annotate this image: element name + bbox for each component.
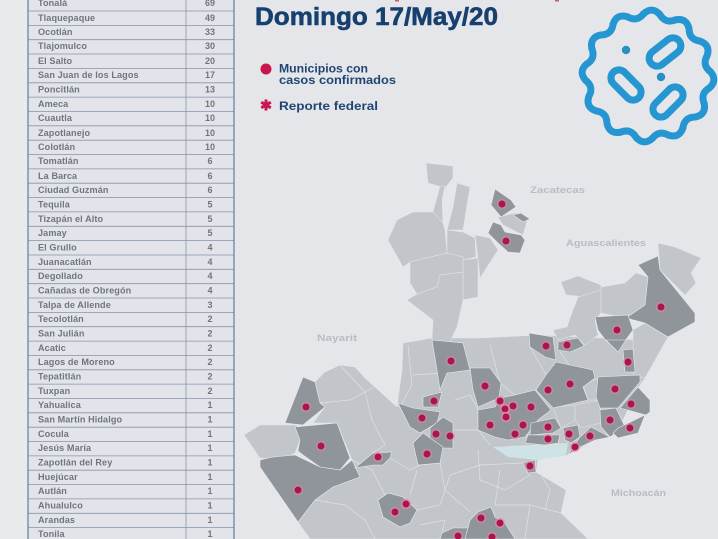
municipality names: Degollado bbox=[38, 271, 83, 281]
municipality names: Juanacatlán bbox=[38, 257, 92, 267]
municipality names: Tecolotlán bbox=[38, 314, 84, 324]
case counts: 2 bbox=[207, 357, 213, 367]
case counts: 1 bbox=[207, 458, 213, 468]
municipality names: Cuautla bbox=[38, 113, 73, 123]
municipality names: Ahualulco bbox=[38, 500, 83, 510]
municipality names: Tonila bbox=[38, 529, 66, 539]
legend: confirmed cases: casos confirmados bbox=[279, 75, 396, 87]
municipality names: Zapotlán del Rey bbox=[38, 458, 113, 468]
map: case markers bbox=[293, 199, 666, 539]
municipality names: Poncitlán bbox=[38, 84, 80, 94]
map: lake Chapala bbox=[493, 443, 568, 460]
case counts: 2 bbox=[207, 343, 213, 353]
municipality names: San Martín Hidalgo bbox=[38, 414, 122, 424]
case counts: 1 bbox=[207, 443, 213, 453]
legend bbox=[260, 64, 396, 113]
case counts: 20 bbox=[205, 56, 215, 66]
case counts bbox=[205, 0, 215, 539]
municipality names: Tizapán el Alto bbox=[38, 214, 104, 224]
case counts: 10 bbox=[205, 113, 215, 123]
municipality names: Tequila bbox=[38, 200, 71, 210]
legend: confirmed cases: Municipios con bbox=[279, 64, 368, 76]
case counts: 1 bbox=[207, 486, 213, 496]
panel: table of municipalities bbox=[28, 0, 234, 539]
case counts: 1 bbox=[207, 529, 213, 539]
municipality names: Ameca bbox=[38, 99, 69, 109]
municipality names: Colotlán bbox=[38, 142, 75, 152]
map: dark municipalities with cases bbox=[260, 189, 695, 539]
municipality names: El Salto bbox=[38, 56, 72, 66]
case counts: 49 bbox=[205, 13, 215, 23]
case counts: 4 bbox=[207, 257, 213, 267]
case counts: 1 bbox=[207, 472, 213, 482]
municipality names bbox=[38, 0, 139, 539]
case counts: 4 bbox=[207, 242, 213, 252]
municipality names: Cañadas de Obregón bbox=[38, 286, 131, 296]
municipality names: San Juan de los Lagos bbox=[38, 70, 139, 80]
title: Domingo 17/May/20 bbox=[255, 3, 498, 31]
municipality names: Tlaquepaque bbox=[38, 13, 95, 23]
case counts: 30 bbox=[205, 41, 215, 51]
case counts: 6 bbox=[207, 156, 213, 166]
case counts: 10 bbox=[205, 142, 215, 152]
case counts: 2 bbox=[207, 328, 213, 338]
municipality names: Arandas bbox=[38, 515, 75, 525]
case counts: 1 bbox=[207, 414, 213, 424]
case counts: 4 bbox=[207, 271, 213, 281]
case counts: 1 bbox=[207, 429, 213, 439]
case counts: 10 bbox=[205, 128, 215, 138]
municipality names: Tomatlán bbox=[38, 156, 79, 166]
case counts: 1 bbox=[207, 515, 213, 525]
map: municipal borders bbox=[315, 345, 583, 539]
municipality names: La Barca bbox=[38, 171, 78, 181]
case counts: 2 bbox=[207, 372, 213, 382]
municipality names: Tlajomulco bbox=[38, 41, 87, 51]
cut-off heading marks bbox=[395, 0, 559, 2]
case counts: 5 bbox=[207, 200, 213, 210]
municipality names: Zapotlanejo bbox=[38, 128, 90, 138]
municipality names: Autlán bbox=[38, 486, 67, 496]
legend: federal report: Reporte federal bbox=[279, 101, 378, 113]
municipality names: Huejúcar bbox=[38, 472, 78, 482]
case counts: 2 bbox=[207, 386, 213, 396]
case counts: 6 bbox=[207, 185, 213, 195]
municipality names: Ciudad Guzmán bbox=[38, 185, 109, 195]
case counts: 13 bbox=[205, 84, 215, 94]
map label: Zacatecas: Zacatecas bbox=[530, 185, 585, 195]
municipality names: Ocotlán bbox=[38, 27, 73, 37]
case counts: 1 bbox=[207, 500, 213, 510]
municipality names: Lagos de Moreno bbox=[38, 357, 115, 367]
map of Jalisco bbox=[244, 163, 701, 539]
case counts: 1 bbox=[207, 400, 213, 410]
map label: Michoacán: Michoacán bbox=[611, 488, 666, 498]
municipality names: San Julián bbox=[38, 328, 84, 338]
case counts: 2 bbox=[207, 314, 213, 324]
municipality names: El Grullo bbox=[38, 242, 77, 252]
case counts: 5 bbox=[207, 228, 213, 238]
municipality names: Acatic bbox=[38, 343, 66, 353]
case counts: 4 bbox=[207, 286, 213, 296]
municipality names: Yahualica bbox=[38, 400, 82, 410]
legend: confirmed cases bbox=[260, 64, 396, 87]
case counts: 17 bbox=[205, 70, 215, 80]
map: light municipalities bbox=[244, 163, 701, 539]
map label: Nayarit: Nayarit bbox=[317, 333, 357, 343]
municipality names: Tepatitlán bbox=[38, 372, 81, 382]
map label: Aguascalientes: Aguascalientes bbox=[566, 238, 646, 248]
municipality names: Talpa de Allende bbox=[38, 300, 111, 310]
case counts: 3 bbox=[207, 300, 213, 310]
municipality names: Cocula bbox=[38, 429, 70, 439]
municipality names: Jesús María bbox=[38, 443, 92, 453]
case counts: 10 bbox=[205, 99, 215, 109]
municipality names: Jamay bbox=[38, 228, 68, 238]
icon: virus badge bbox=[571, 0, 718, 153]
case counts: 6 bbox=[207, 171, 213, 181]
case counts: 5 bbox=[207, 214, 213, 224]
municipality names: Tuxpan bbox=[38, 386, 70, 396]
case counts: 33 bbox=[205, 27, 215, 37]
